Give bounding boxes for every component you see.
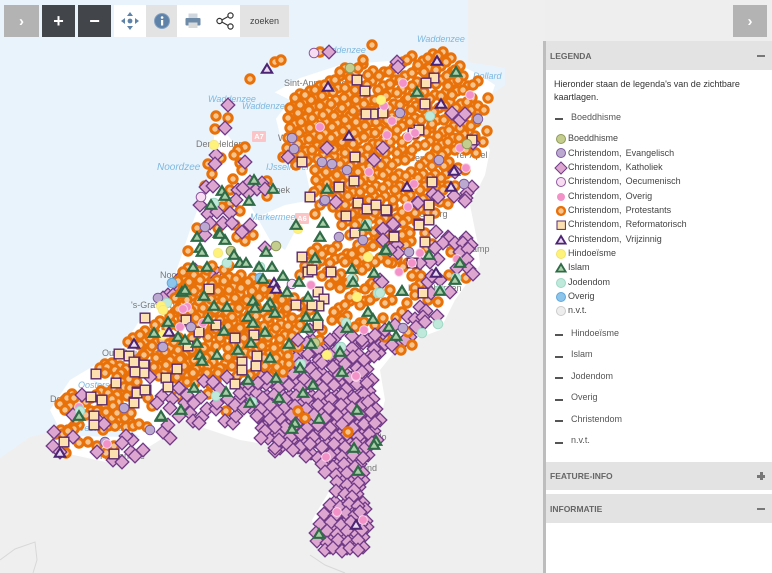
legend header: LEGENDA bbox=[550, 50, 592, 60]
text: Hindoeïsme bbox=[568, 248, 616, 258]
markers: Evangelisch bbox=[105, 113, 478, 442]
text: Christendom, Overig bbox=[568, 191, 652, 201]
button: search: zoeken bbox=[250, 16, 279, 26]
legend intro: Hieronder staan de legenda's van de zichtbare kaartlagen. bbox=[554, 79, 740, 102]
feature-info header: FEATURE-INFO bbox=[550, 471, 613, 481]
button: open panel left bbox=[4, 5, 39, 37]
map labels: places: Grootebroek bbox=[240, 185, 291, 195]
map labels: places: Denekamp bbox=[446, 244, 490, 254]
text: Christendom, Protestants bbox=[568, 205, 671, 215]
map labels: places: Oud-Beijerland bbox=[102, 348, 162, 358]
text: Jodendom bbox=[568, 277, 610, 287]
legend item: Oecumenisch bbox=[556, 176, 681, 187]
legend item: Islam bbox=[554, 262, 590, 272]
text: Christendom bbox=[571, 414, 622, 424]
text: Overig bbox=[568, 291, 595, 301]
map labels: places: Roermond bbox=[335, 463, 377, 473]
feature-info header bbox=[546, 462, 772, 490]
legend item: Reformatorisch bbox=[556, 219, 687, 230]
top-right map strip bbox=[545, 0, 772, 41]
map labels: water: Waddenzee bbox=[242, 101, 290, 111]
markers: Protestants bbox=[56, 56, 473, 434]
button: open panel right bbox=[733, 5, 767, 37]
map labels: water: Waddenzee bbox=[417, 34, 465, 44]
legend item: n.v.t. bbox=[556, 305, 587, 316]
button: print bbox=[177, 5, 209, 37]
sidebar panel bbox=[543, 41, 772, 573]
markers: Katholiek fill-in layer bbox=[168, 270, 410, 548]
map labels: water: Waddenzee bbox=[208, 94, 256, 104]
legend item: Evangelisch bbox=[556, 148, 674, 158]
map labels: water: Dollard bbox=[473, 71, 503, 81]
text: Boeddhisme bbox=[571, 112, 621, 122]
markers: Overig bbox=[79, 83, 470, 520]
button: open panel right: › bbox=[748, 12, 752, 30]
markers: Overig (blauw) bbox=[172, 278, 260, 283]
markers: Protestants fill-in layer bbox=[61, 52, 478, 430]
map labels: water: Markermeer bbox=[250, 212, 300, 222]
map labels: places: Beilen bbox=[400, 153, 425, 163]
button: pan bbox=[114, 5, 146, 37]
text: Boeddhisme bbox=[568, 133, 618, 143]
button: zoom out bbox=[78, 5, 111, 37]
legend item: Boeddhisme bbox=[556, 133, 618, 144]
button: open panel left: › bbox=[19, 12, 24, 30]
legend item: Hindoeïsme bbox=[556, 248, 616, 259]
text: n.v.t. bbox=[568, 305, 587, 315]
button: zoom in: + bbox=[53, 10, 64, 30]
button: zoom in bbox=[42, 5, 75, 37]
road shields: A6 bbox=[297, 214, 307, 223]
map labels: water: Oosterschelde bbox=[78, 380, 136, 390]
text: n.v.t. bbox=[571, 435, 590, 445]
map labels: places: Hardenberg bbox=[400, 209, 448, 219]
legend item: Vrijzinnig bbox=[554, 234, 662, 244]
legend item: Protestants bbox=[556, 205, 671, 216]
markers: Islam bbox=[79, 72, 460, 534]
text: Islam bbox=[568, 262, 590, 272]
markers: Protestants (edge and south) bbox=[66, 45, 488, 453]
map labels: places bbox=[50, 78, 490, 473]
map labels: places: Haaksbergen bbox=[408, 283, 462, 293]
informatie header: INFORMATIE bbox=[550, 504, 602, 514]
map labels: places: Sint-Annaparochie bbox=[284, 78, 358, 88]
map labels: places: Wieringerwerf bbox=[278, 133, 334, 143]
markers: Boeddhisme bbox=[231, 68, 467, 343]
text: Jodendom bbox=[571, 371, 613, 381]
button: share bbox=[209, 5, 240, 37]
legend item: Katholiek bbox=[554, 161, 663, 175]
map labels: places: Domburg bbox=[50, 394, 87, 404]
informatie header bbox=[546, 494, 772, 523]
map labels: places: Hontenisse bbox=[100, 451, 145, 461]
map labels: water: Noordzee bbox=[157, 162, 201, 173]
markers: Oecumenisch bbox=[201, 53, 314, 284]
map labels: water: Westerschelde bbox=[76, 423, 135, 433]
text: Christendom, Katholiek bbox=[568, 162, 663, 172]
legend item: Jodendom bbox=[556, 277, 610, 288]
button: zoom out: − bbox=[89, 10, 100, 30]
text: Christendom, Oecumenisch bbox=[568, 176, 681, 186]
legend item: Overig blue bbox=[556, 291, 595, 302]
markers: Vrijzinnig bbox=[60, 61, 454, 525]
map labels: water: IJsselmeer bbox=[266, 162, 311, 172]
text: Overig bbox=[571, 392, 598, 402]
map labels: places: Ter Apel bbox=[455, 150, 488, 160]
legend header bbox=[546, 41, 772, 70]
road shields: A7 bbox=[254, 132, 264, 141]
text: Hindoeïsme bbox=[571, 328, 619, 338]
button: search bbox=[240, 5, 289, 37]
markers: Hindoeisme bbox=[161, 100, 381, 355]
markers: Jodendom bbox=[80, 116, 456, 411]
map labels: places: Den Helder bbox=[196, 139, 242, 149]
text: Christendom, Reformatorisch bbox=[568, 219, 687, 229]
map labels: water: Waddenzee bbox=[318, 45, 366, 55]
map labels: places: Venlo bbox=[364, 432, 387, 442]
markers: Katholiek (dense south) bbox=[163, 273, 405, 551]
text: Christendom, Vrijzinnig bbox=[568, 234, 662, 244]
markers: Reformatorisch bbox=[64, 78, 472, 454]
map labels: places: 's-Gravenhage bbox=[131, 300, 190, 310]
road shields bbox=[252, 131, 309, 224]
button: info bbox=[146, 5, 177, 37]
text: Christendom, Evangelisch bbox=[568, 148, 674, 158]
map labels: water bbox=[76, 34, 503, 433]
text: Islam bbox=[571, 349, 593, 359]
map labels: places: Noordwijk bbox=[160, 270, 200, 280]
legend item: Overig bbox=[557, 191, 652, 201]
markers: Katholiek (mixed areas) bbox=[53, 52, 473, 462]
